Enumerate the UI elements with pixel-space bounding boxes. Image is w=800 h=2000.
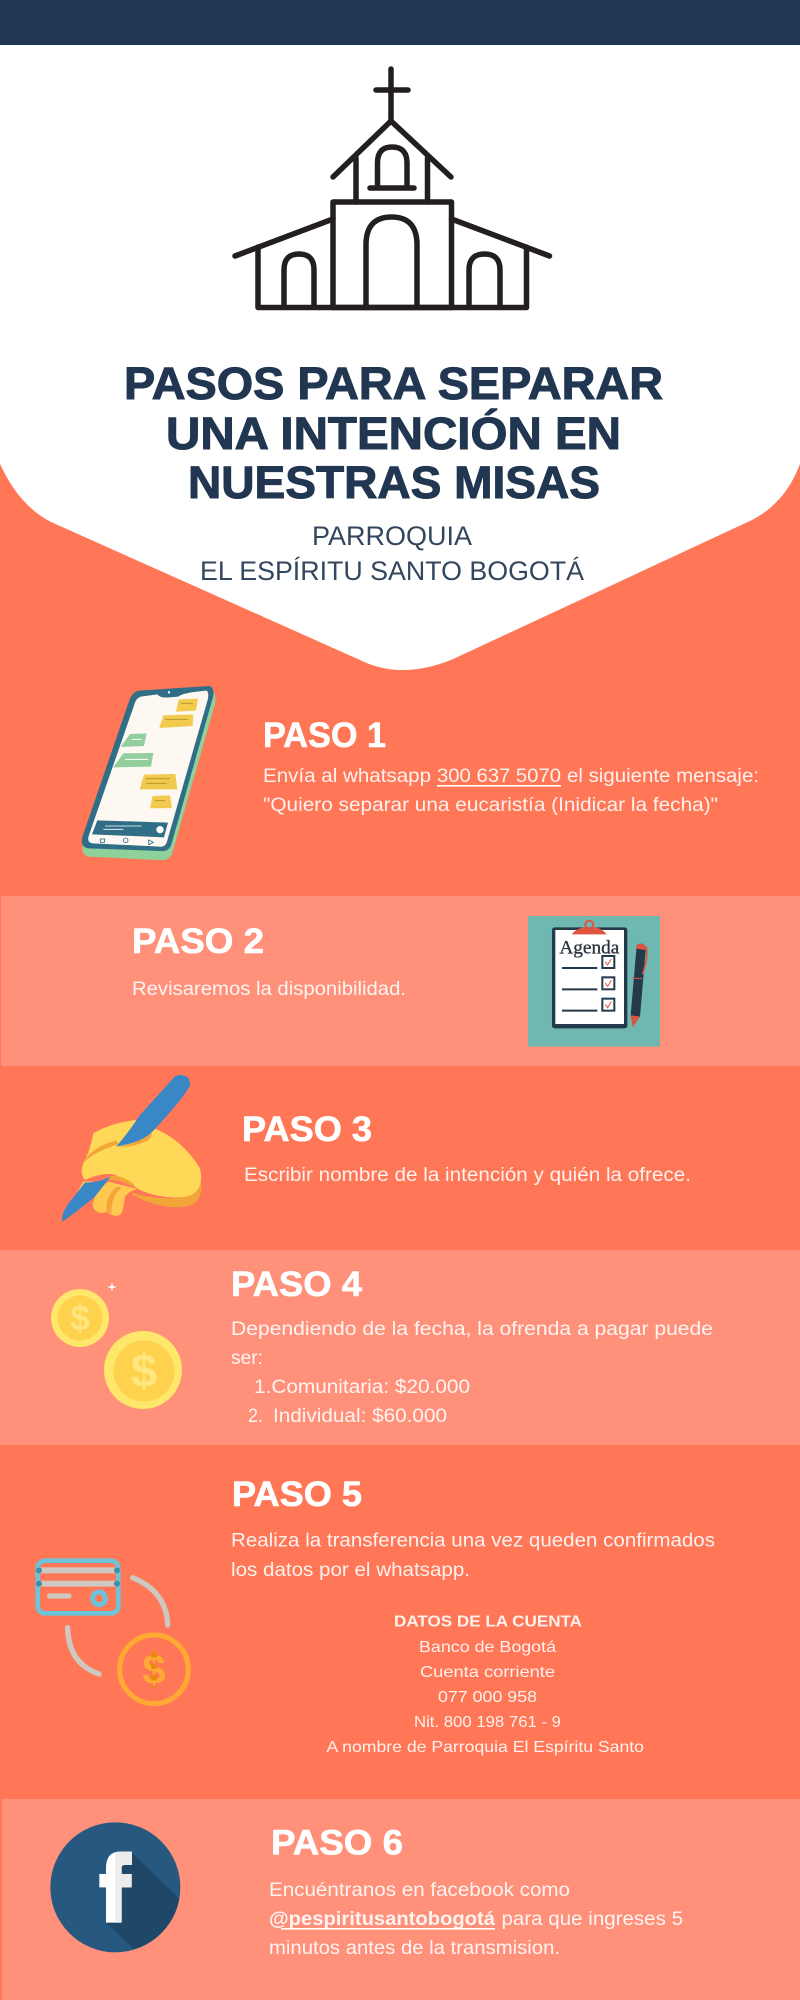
text: instrucciones whatsapp	[263, 766, 759, 816]
panel: paso 5	[0, 1445, 800, 1799]
text: ofrenda: Dependiendo de la fecha, la ofrenda a pagar puede	[231, 1319, 713, 1340]
text: datos de la cuenta: Nit. 800 198 761 - 9	[414, 1714, 561, 1731]
text: instrucciones whatsapp: 300 637 5070	[437, 766, 561, 787]
icon: phone with chat	[82, 686, 216, 860]
text: datos de la cuenta: Banco de Bogotá	[419, 1639, 556, 1656]
icon: coins: $	[70, 1299, 90, 1338]
title: NUESTRAS MISAS	[188, 457, 600, 508]
text: nombre de la intencion: Escribir nombre de la intención y quién la ofrece.	[244, 1165, 691, 1186]
text: instrucciones whatsapp: Envía al whatsapp	[263, 766, 431, 787]
heading: paso 1: PASO 1	[263, 716, 386, 755]
panel: paso 1	[0, 672, 800, 896]
text: transferencia: Realiza la transferencia una vez queden confirmados	[231, 1530, 715, 1552]
icon: church	[235, 69, 550, 308]
icon: agenda clipboard: Agenda	[559, 937, 620, 958]
panel: paso 4	[0, 1250, 800, 1445]
heading: paso 4: PASO 4	[231, 1265, 363, 1304]
text: facebook instrucciones	[269, 1880, 683, 1959]
text: ofrenda: 1.Comunitaria: $20.000	[254, 1377, 470, 1398]
text: facebook instrucciones: Encuéntranos en facebook como	[269, 1880, 570, 1901]
text: datos de la cuenta: 077 000 958	[438, 1689, 537, 1706]
icon: card to coin transfer	[36, 1561, 188, 1704]
text: ofrenda	[231, 1319, 713, 1427]
title: PASOS PARA SEPARAR	[124, 358, 663, 409]
text: ofrenda: Individual: $60.000	[273, 1406, 447, 1427]
text: datos de la cuenta: DATOS DE LA CUENTA	[394, 1614, 582, 1630]
subtitle	[200, 521, 584, 586]
text: transferencia	[231, 1530, 715, 1581]
panel: paso 6	[2, 1799, 800, 2000]
text: instrucciones whatsapp: el siguiente mensaje:	[567, 766, 759, 787]
heading: paso 2: PASO 2	[132, 922, 264, 961]
text: facebook instrucciones: para que ingreses 5	[502, 1909, 683, 1930]
title	[124, 358, 663, 508]
text: ofrenda: ser:	[231, 1348, 263, 1369]
icon: facebook	[50, 1822, 180, 1952]
text: ofrenda: 2.	[248, 1406, 263, 1427]
text: datos de la cuenta: Cuenta corriente	[420, 1664, 555, 1681]
text: datos de la cuenta	[326, 1614, 644, 1756]
icon: coins: $	[131, 1344, 157, 1397]
heading: paso 5: PASO 5	[232, 1475, 362, 1514]
text: facebook instrucciones: minutos antes de la transmision.	[269, 1938, 560, 1959]
heading: paso 6: PASO 6	[271, 1824, 403, 1862]
top navy bar	[0, 0, 800, 45]
text: datos de la cuenta: A nombre de Parroquia El Espíritu Santo	[326, 1739, 644, 1756]
heading: paso 3: PASO 3	[242, 1110, 372, 1149]
subtitle: PARROQUIA	[312, 521, 472, 551]
panel: paso 3	[0, 1066, 800, 1250]
text: disponibilidad: Revisaremos la disponibilidad.	[132, 979, 406, 1000]
text: transferencia: los datos por el whatsapp.	[231, 1560, 470, 1581]
icon: coins	[51, 1282, 182, 1409]
icon: card to coin transfer: $	[142, 1646, 166, 1693]
panel: header	[0, 0, 800, 670]
text: instrucciones whatsapp: "Quiero separar una eucaristía (Inidicar la fecha)"	[263, 795, 718, 816]
subtitle: EL ESPÍRITU SANTO BOGOTÁ	[200, 556, 584, 586]
icon: agenda clipboard	[528, 916, 660, 1047]
text: facebook instrucciones: @pespiritusantobogotá	[269, 1909, 495, 1930]
panel: paso 2	[1, 896, 800, 1066]
title: UNA INTENCIÓN EN	[166, 408, 621, 459]
icon: hand writing	[62, 1075, 201, 1222]
